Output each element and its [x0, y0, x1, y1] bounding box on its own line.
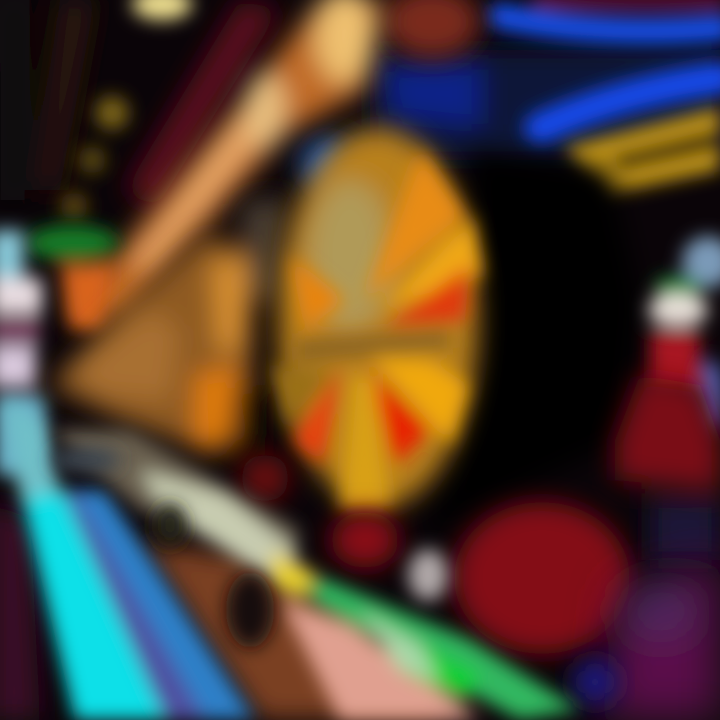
bottom-left floor with cyan stripes — [0, 500, 460, 720]
red base under wheel — [241, 454, 399, 568]
dark post markers — [50, 448, 448, 648]
dark wheel shadow on the right — [420, 150, 640, 540]
diagonal tan arm — [70, 0, 385, 320]
top-left dark stripes — [0, 0, 280, 210]
top red-brown figure — [384, 0, 480, 58]
large red blob — [454, 502, 630, 654]
top blue and navy area — [302, 50, 720, 193]
main wheel disc — [278, 128, 478, 508]
wheel wedges — [272, 150, 482, 510]
green ledge at left — [26, 225, 118, 330]
bottom-right purple floor — [600, 560, 720, 720]
left gold wheels panel — [50, 195, 285, 455]
yellow sign — [565, 108, 720, 195]
top-left glowing lights — [60, 0, 192, 220]
green and white counter strip — [50, 430, 580, 720]
right side figure — [648, 236, 720, 431]
left striped column — [0, 230, 45, 475]
top-right blue neon bands — [500, 0, 720, 128]
